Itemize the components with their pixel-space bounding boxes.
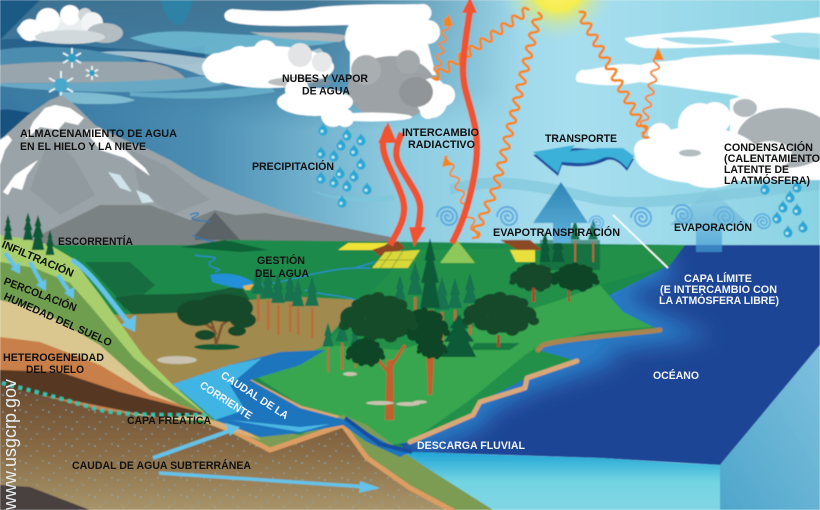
label: humedad del suelo: HUMEDAD DEL SUELO <box>2 291 114 349</box>
evapotranspiration arrow <box>533 182 588 243</box>
sun <box>498 0 618 45</box>
ground base <box>0 245 420 510</box>
deep ocean cross section <box>395 345 820 510</box>
label: latente de: LATENTE DE <box>724 164 789 176</box>
foreground land <box>258 245 685 445</box>
label: capa freática: CAPA FREÁTICA <box>127 414 211 427</box>
stream <box>173 350 412 457</box>
label: almacenamiento: ALMACENAMIENTO DE AGUA <box>20 128 177 140</box>
ocean surface <box>380 245 820 465</box>
label: de agua: DE AGUA <box>302 86 350 98</box>
boundary layer pointer line <box>613 215 668 268</box>
acacia tree <box>177 294 256 350</box>
pine grove <box>252 266 360 372</box>
beaches <box>247 330 660 442</box>
label: del agua: DEL AGUA <box>255 268 309 280</box>
clouds: nubes y vapor <box>202 4 455 127</box>
water table dotted line <box>2 383 211 415</box>
orange wave arrowheads <box>442 14 664 167</box>
turbulence swirls <box>437 205 770 229</box>
label: atmósfera libre: LA ATMÓSFERA LIBRE) <box>659 294 779 307</box>
label: descarga fluvial: DESCARGA FLUVIAL <box>417 440 525 452</box>
label: la atmósfera: LA ATMÓSFERA) <box>724 174 810 187</box>
label: corriente: CORRIENTE <box>197 379 254 422</box>
label: radiactivo: RADIACTIVO <box>408 139 475 151</box>
label: caudal de agua subterránea: CAUDAL DE AGUA SUBTERRÁNEA <box>72 459 251 472</box>
label: heterogeneidad: HETEROGENEIDAD <box>3 352 104 364</box>
red radiative exchange arrows <box>378 0 477 247</box>
label: intercambio con: (E INTERCAMBIO CON <box>660 284 777 296</box>
label: evapotranspiración: EVAPOTRANSPIRACIÓN <box>493 226 620 239</box>
label: calentamiento: (CALENTAMIENTO <box>724 153 820 165</box>
label: intercambio: INTERCAMBIO <box>402 127 479 139</box>
hillside soil layers <box>0 235 213 420</box>
label: del suelo: DEL SUELO <box>26 364 84 376</box>
sky background <box>0 0 820 260</box>
label: transporte: TRANSPORTE <box>545 133 617 145</box>
orange radiation waves <box>433 8 659 238</box>
label: caudal de la: CAUDAL DE LA <box>218 369 290 422</box>
label: evaporación: EVAPORACIÓN <box>674 221 752 234</box>
evaporation arrow <box>670 188 750 252</box>
forest <box>339 219 600 420</box>
label: percolación: PERCOLACIÓN <box>2 275 79 314</box>
clouds: upper left <box>17 5 123 44</box>
subsurface layers <box>0 385 493 510</box>
label: condensación: CONDENSACIÓN <box>724 141 813 154</box>
label: precipitación: PRECIPITACIÓN <box>252 160 334 173</box>
snowflakes <box>49 48 98 99</box>
label: escorrentía: ESCORRENTÍA <box>58 235 133 248</box>
precipitation drops <box>316 123 372 208</box>
condensation drops <box>760 180 808 238</box>
mountains <box>0 95 395 252</box>
groundwater and infiltration arrows <box>5 253 380 493</box>
river valley ground <box>110 297 362 392</box>
label: hielo y nieve: EN EL HIELO Y LA NIEVE <box>20 141 146 153</box>
transport arrow <box>533 145 634 176</box>
conifers by the hill <box>4 212 54 255</box>
lake and water management <box>195 255 375 302</box>
label: capa límite: CAPA LÍMITE <box>684 272 752 285</box>
label: source url: www.usgcrp.gov <box>0 379 20 510</box>
label: gestión: GESTIÓN <box>257 254 305 267</box>
back land <box>70 240 685 345</box>
label: océano: OCÉANO <box>653 369 699 382</box>
clouds: upper right and condensation <box>576 17 820 188</box>
fields <box>338 240 542 268</box>
label: infiltración: INFILTRACIÓN <box>0 238 76 280</box>
label: nubes y vapor de agua: NUBES Y VAPOR <box>282 73 368 85</box>
